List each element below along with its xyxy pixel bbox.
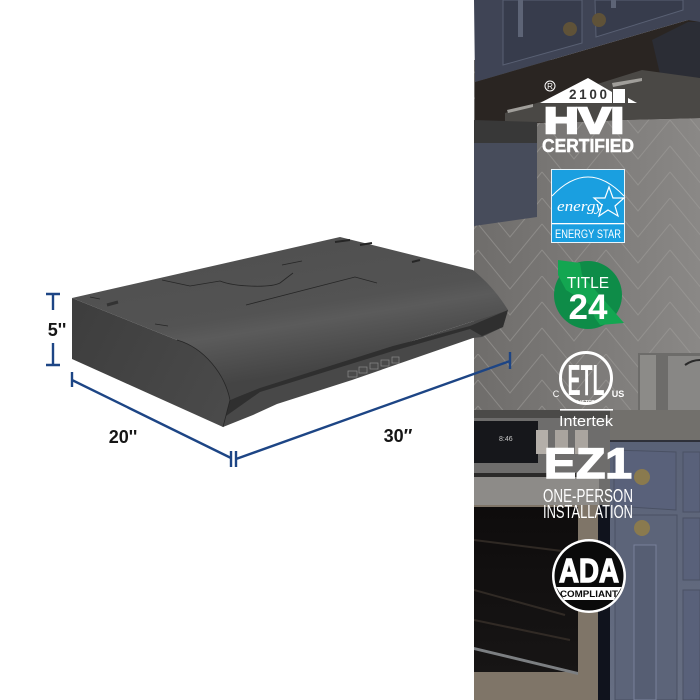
stove range [474,410,610,512]
badge: ETL listed Intertek: ETL [568,356,604,405]
background: white product area [0,0,474,700]
hood side panel [72,298,230,427]
badge: HVI certified: R [547,82,553,91]
countertop [610,410,700,440]
badge: Title 24: TITLE [567,275,609,292]
dimension: depth 20 inches [72,372,231,467]
badge: EZ1 one-person installation [543,440,633,522]
hood dark stripe [226,310,508,416]
badge: Energy Star: energy [557,199,603,215]
dimension: height 5 inches [46,294,66,365]
badge: Energy Star: ENERGY STAR [555,229,621,241]
oven door [474,505,599,700]
dark gap beside oven [598,505,611,700]
range hood in photo [475,20,700,125]
stove range: 8:46 [499,436,513,443]
control buttons [348,357,399,377]
dimension: width 30 inches [236,352,510,467]
badge: ADA compliant [552,539,626,613]
badge: ETL listed Intertek: LISTED [577,400,595,406]
badge: Title 24 [554,260,624,329]
badge: HVI certified: 2100 [569,87,607,102]
dimension: width 30 inches: 30″ [384,426,413,446]
dimension: height 5 inches: 5'' [48,320,66,340]
badge: ETL listed Intertek: US [612,389,624,399]
badge: ETL listed Intertek: Intertek [559,414,614,430]
badge: HVI certified: CERTIFIED [542,135,634,156]
badge: Energy Star [552,170,624,242]
kitchen photo panel [474,0,700,700]
badge: EZ1 one-person installation: EZ1 [544,440,632,488]
hood top details [90,240,420,326]
dark wall cabinet left [474,120,537,226]
badge: EZ1 one-person installation: ONE-PERSON [543,486,633,506]
backsplash wall [474,60,700,420]
badge: Title 24: 24 [569,288,608,327]
badge: ADA compliant: COMPLIANT [560,589,619,599]
badge: ETL listed Intertek: C [553,389,560,399]
badge: ADA compliant: ADA [559,552,619,589]
cabinet knobs lower [634,469,650,536]
dimension: depth 20 inches: 20'' [109,427,137,447]
cooking pot [638,353,700,413]
badge: HVI certified [540,78,637,156]
cabinet knobs upper [563,13,606,36]
range hood product [72,237,508,427]
hood front lip [223,310,508,427]
badge: HVI certified: HVI [544,100,624,141]
lower cabinets [610,440,700,700]
badge: ETL listed Intertek [553,352,624,430]
hood top and curved front [72,237,508,400]
badge: EZ1 one-person installation: INSTALLATION [543,502,633,522]
upper cabinets [474,0,700,82]
